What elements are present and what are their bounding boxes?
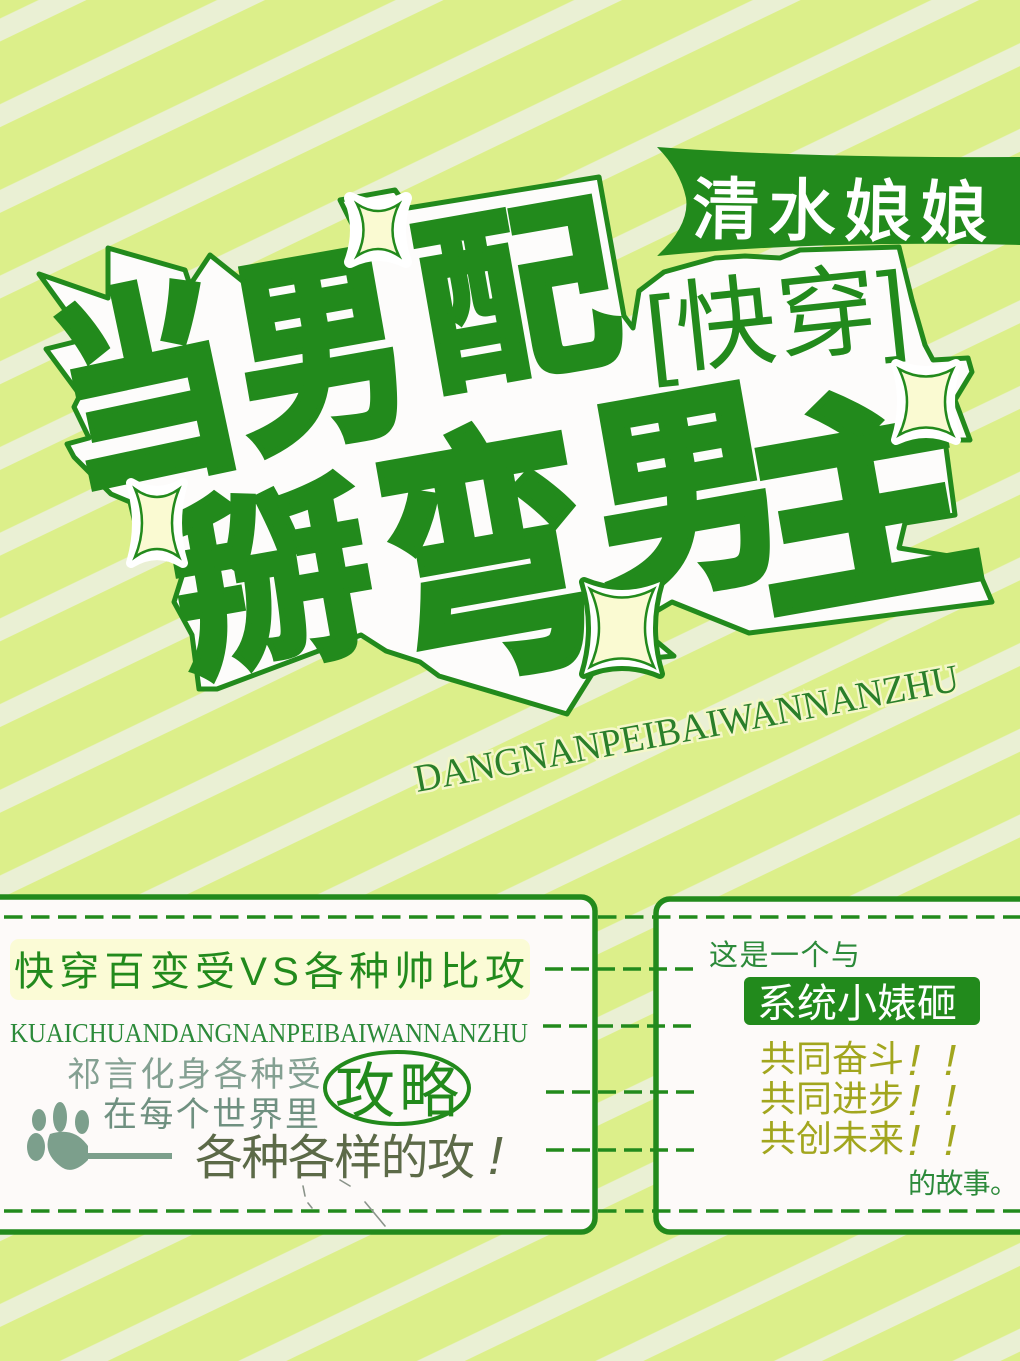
- icon: paw with line: [27, 1102, 172, 1170]
- panel: left story card: [0, 897, 595, 1232]
- sparkle star: right: [896, 364, 956, 440]
- sparkle star: left: [131, 483, 183, 563]
- title glyph 配: 配: [402, 176, 635, 420]
- sparkle star: bottom: [584, 582, 660, 674]
- badge: 系统小婊砸: 系统小婊砸: [757, 982, 957, 1026]
- author ribbon: 清水娘娘: [657, 147, 1020, 256]
- highlight band: 快穿百变受VS各种帅比攻: 快穿百变受VS各种帅比攻: [14, 950, 525, 994]
- title glyph 掰: 掰: [155, 458, 390, 708]
- title glyph 男: 男: [214, 222, 428, 485]
- text: 的故事。: 的故事。: [908, 1168, 1018, 1199]
- text: 共同进步: 共同进步: [760, 1078, 904, 1119]
- title glyph 当: 当: [33, 255, 259, 527]
- text: 共同奋斗: !: [944, 1036, 956, 1085]
- text: 各种各样的攻!: 各种各样的攻: [195, 1132, 475, 1185]
- text: 各种各样的攻!: !: [488, 1126, 503, 1186]
- text: 共同进步: !: [908, 1076, 920, 1125]
- text: 共创未来: 共创未来: [760, 1118, 904, 1159]
- author ribbon: 清水娘娘: 清水娘娘: [691, 172, 988, 252]
- pinyin title line: DANGNANPEIBAIWANNANZHU: [411, 657, 962, 801]
- panel: right story card: [656, 899, 1020, 1232]
- title lockup: 当男配掰弯男主: [33, 176, 998, 726]
- text: 共同进步: !: [944, 1076, 956, 1125]
- text: 共同奋斗: !: [908, 1036, 920, 1085]
- text: 这是一个与: 这是一个与: [709, 939, 860, 972]
- text: 祁言化身各种受: 祁言化身各种受: [67, 1056, 321, 1094]
- pinyin line: KUAICHUANDANGNANPEIBAIWANNANZHU: [10, 1018, 528, 1048]
- text: 共同奋斗: 共同奋斗: [760, 1038, 904, 1079]
- title glyph 男 second: 男: [570, 356, 803, 636]
- title glyph 弯: 弯: [359, 397, 618, 726]
- text: 共创未来: !: [908, 1116, 920, 1165]
- title glyph 主: 主: [727, 360, 998, 651]
- text: 共创未来: !: [944, 1116, 956, 1165]
- subtitle tag: [快穿]: [快穿]: [640, 251, 913, 389]
- sparkle star: top: [350, 198, 406, 262]
- text: 在每个世界里: 在每个世界里: [103, 1096, 319, 1134]
- stamp: 攻略: 攻略: [335, 1058, 459, 1125]
